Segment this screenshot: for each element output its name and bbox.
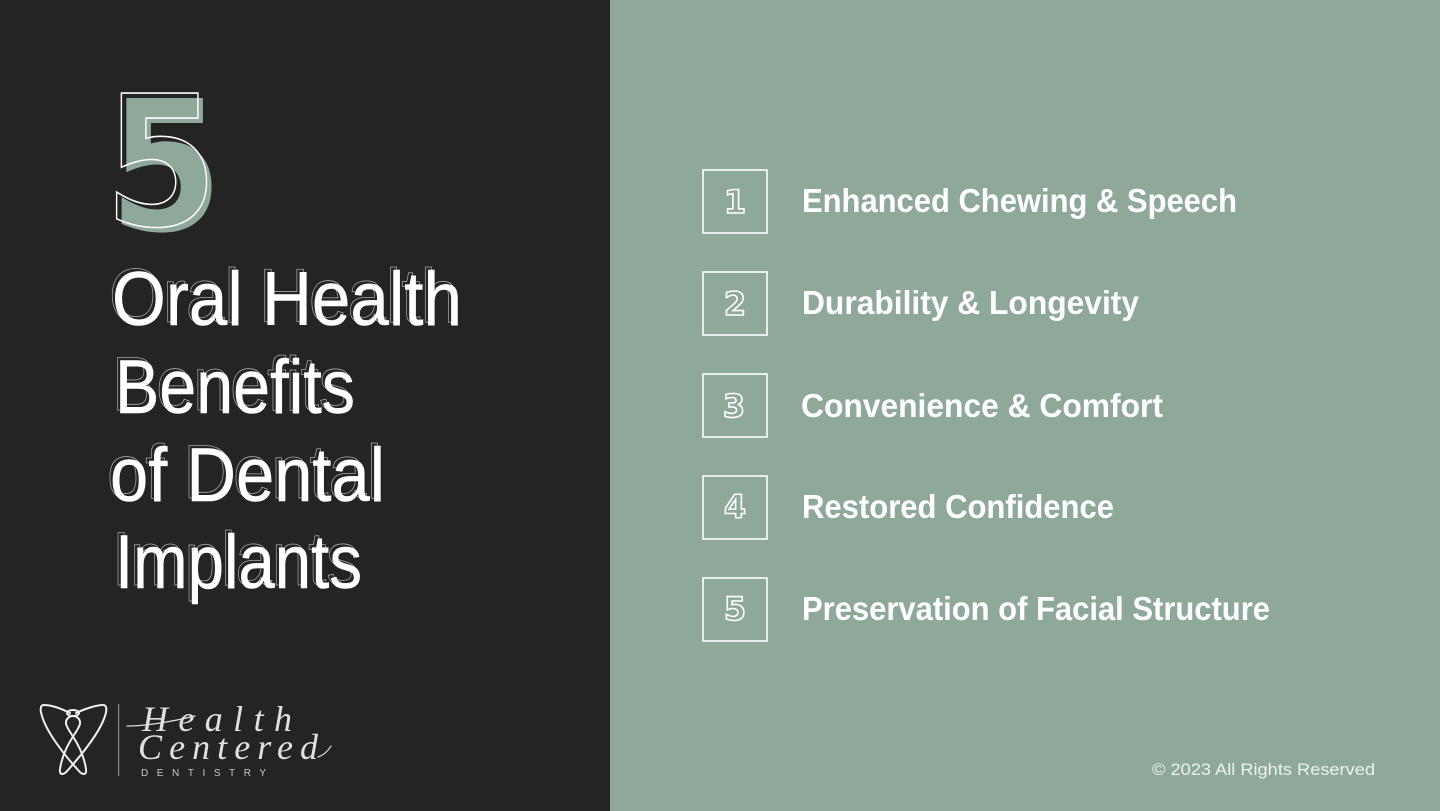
panel: green right background (610, 0, 1440, 811)
list item 1: 1 (724, 183, 746, 221)
title: Benefits (115, 345, 355, 430)
list item 5: 5 (724, 590, 746, 628)
title: Oral Health (109, 254, 459, 339)
logo script wordmark: Centered (138, 727, 319, 767)
list item 3: Convenience & Comfort (801, 388, 1163, 425)
list item 2: 2 (724, 285, 746, 323)
logo divider (118, 704, 119, 776)
title: of Dental (110, 433, 385, 518)
list item 5 (703, 578, 1270, 641)
copyright: © 2023 All Rights Reserved (1152, 760, 1375, 779)
logo tagline: DENTISTRY (141, 768, 266, 779)
panel: dark left background (0, 0, 610, 811)
list item 3: 3 (723, 387, 745, 425)
list item 2 (703, 272, 1139, 335)
list item 5: Preservation of Facial Structure (802, 591, 1270, 628)
list item 2: Durability & Longevity (802, 285, 1139, 322)
title: Implants (112, 517, 359, 602)
title: Benefits (112, 342, 352, 427)
big numeral 5: 5 (104, 57, 218, 268)
list item 3 (703, 374, 1163, 437)
list item 1 (703, 170, 1237, 233)
list item 4: 4 (724, 488, 746, 526)
logo: Health Centered Dentistry (41, 699, 331, 779)
title (107, 254, 462, 605)
title: of Dental (107, 430, 382, 515)
big numeral 5: 5 (109, 62, 223, 273)
list item 1: Enhanced Chewing & Speech (802, 183, 1237, 220)
logo script wordmark: Health (141, 699, 292, 739)
icon: tooth logo mark (41, 705, 106, 774)
list item 4 (703, 476, 1114, 539)
title: Implants (115, 520, 362, 605)
title: Oral Health (112, 257, 462, 342)
list item 4: Restored Confidence (802, 489, 1114, 526)
logo script wordmark (127, 699, 331, 767)
